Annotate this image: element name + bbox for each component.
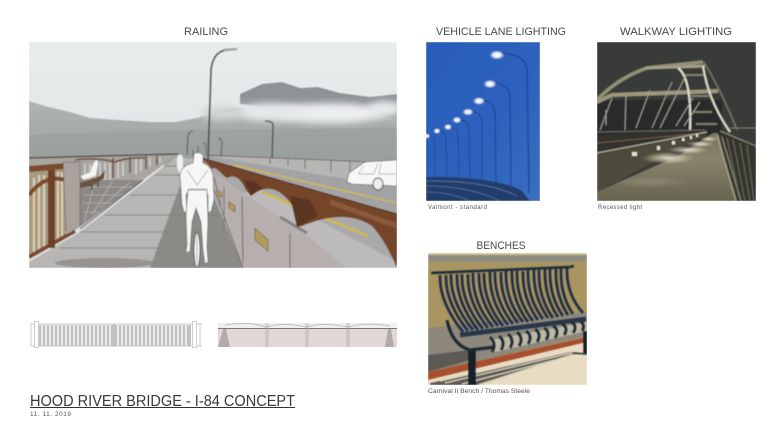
heading: benches: BENCHES [476, 240, 526, 252]
walkway deck [597, 133, 735, 201]
far left railing [29, 154, 178, 182]
caption: bench: Carnival II Bench / Thomas Steele [428, 389, 531, 395]
far right railing [207, 154, 397, 187]
bench back slats [440, 268, 583, 332]
recessed lights [632, 134, 698, 156]
walkway deck [29, 157, 243, 268]
railing elevation left [30, 322, 202, 348]
bench seat slats [490, 322, 587, 352]
light pools on deck [622, 136, 717, 186]
photo: bench [428, 253, 587, 385]
bench arm and legs [447, 320, 495, 350]
heading: walkway lighting: WALKWAY LIGHTING [620, 26, 732, 38]
photo: vehicle lane lighting [424, 42, 540, 201]
caption: vehicle lights: Valmont - standard [428, 205, 487, 211]
lower roadway beneath rail [208, 164, 394, 260]
cyclist [180, 153, 214, 268]
slat shadow stripes [430, 352, 580, 385]
upper roadway [202, 156, 397, 216]
arch structure [597, 62, 737, 132]
near left railing [29, 162, 80, 258]
patio paving [80, 180, 143, 229]
bench top rail [431, 266, 574, 273]
title: HOOD RIVER BRIDGE - I-84 CONCEPT [30, 393, 295, 410]
caption: walkway lights: Recessed light [598, 205, 642, 211]
panel: railing perspective rendering [29, 42, 403, 268]
ground layers [428, 312, 587, 372]
railing elevation right [218, 323, 397, 347]
light poles [187, 49, 273, 160]
heading: railing: RAILING [184, 26, 228, 38]
light poles [427, 53, 529, 193]
timber arched railing [202, 158, 397, 268]
concrete wall [203, 160, 347, 268]
right railing [720, 131, 756, 201]
photo: walkway lighting [597, 42, 756, 201]
seated figure on bench [80, 160, 105, 190]
heading: vehicle lane lighting: VEHICLE LANE LIGHTING [436, 26, 566, 38]
date: 11. 11. 2019 [30, 411, 71, 418]
distant pedestrian [177, 155, 183, 173]
recessed wall lights [217, 190, 268, 251]
car [347, 160, 397, 190]
hills and fog [29, 82, 403, 165]
bridge side wall [598, 130, 692, 151]
dark curved roadway edge [426, 177, 530, 201]
lamps [424, 50, 504, 138]
